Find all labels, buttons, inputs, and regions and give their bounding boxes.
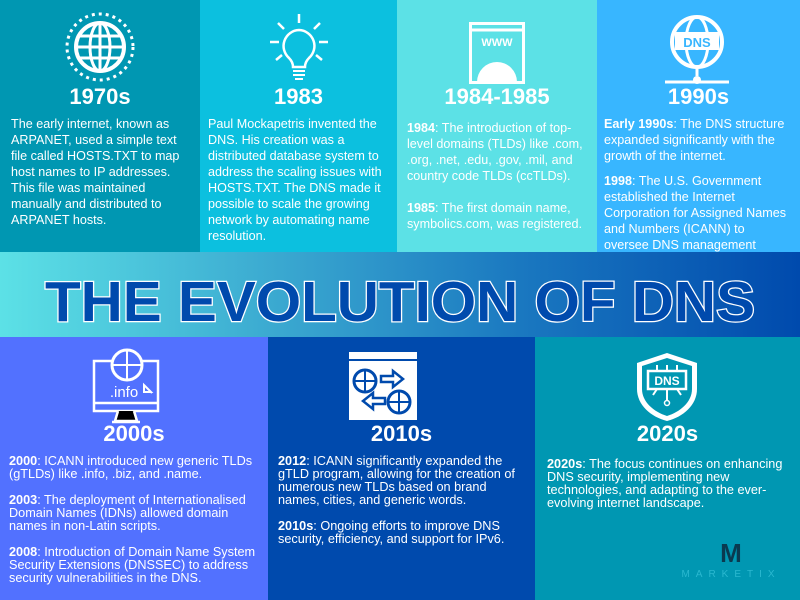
heading: 1970s (69, 84, 131, 109)
icon: DNS shield: DNS (654, 374, 680, 388)
heading: 2010s (371, 421, 432, 446)
icon: DNS globe (665, 15, 729, 84)
text: 1984: The introduction of top-level domains (TLDs) like .com, .org, .net, .edu, .gov, .mil, and country code TLDs (ccTLDs). (407, 121, 583, 183)
logo: Marketix: M (720, 538, 742, 568)
logo: Marketix (681, 538, 781, 580)
heading: 1990s (668, 84, 729, 109)
panel: 2000s (0, 337, 268, 600)
panel: 1983 (200, 0, 397, 252)
icon: DNS globe: DNS (683, 35, 711, 50)
panel: 1984-1985 (397, 0, 597, 252)
text: 2020s: The focus continues on enhancing DNS security, implementing new technologies, and adapting to the ever-evolving internet landscape. (547, 457, 782, 510)
icon: light bulb (270, 14, 328, 80)
icon: DNS shield (637, 353, 697, 421)
heading: 1984-1985 (444, 84, 550, 109)
heading: 2000s (103, 421, 165, 446)
text: 2012: ICANN significantly expanded the gTLD program, allowing for the creation of numerous new TLDs based on brand names, cities, and generic words. 2010s: Ongoing efforts to improve DNS security, efficiency, and support for IPv6. (278, 454, 515, 546)
icon: www browser: WWW (481, 37, 513, 49)
icon: globe exchange (349, 352, 417, 420)
heading: 2020s (637, 421, 698, 446)
text: 2000: ICANN introduced new generic TLDs (gTLDs) like .info, .biz, and .name. 2003: The deployment of Internationalised Domain Names (IDNs) allowed domain names in non-Latin scripts. 2008: Introduction of Domain Name System Security Extensions (DNSSEC) to address security vulnerabilities in the DNS. (9, 454, 255, 585)
icon: monitor .info: .info (110, 384, 138, 401)
icon: globe (66, 12, 134, 82)
text: 1985: The first domain name, symbolics.com, was registered. (407, 201, 582, 231)
heading: 1983 (274, 84, 323, 109)
panel: 2020s (535, 337, 800, 600)
text: Early 1990s: The DNS structure expanded significantly with the growth of the internet. 1998: The U.S. Government established the Internet Corporation for Assigned Names and Numbers (ICANN) to oversee DNS management (604, 117, 786, 252)
icon: monitor .info (92, 348, 160, 424)
text: Paul Mockapetris invented the DNS. His creation was a distributed database system to address the scaling issues with HOSTS.TXT. The DNS made it possible to scale the growing network by automating name resolution. (208, 117, 382, 243)
title band (0, 252, 800, 337)
text (407, 121, 583, 231)
icon: www browser (469, 22, 525, 84)
logo: Marketix: MARKETIX (681, 569, 781, 580)
panel: 2010s (268, 337, 535, 600)
panel: 1990s (597, 0, 800, 252)
text: The early internet, known as ARPANET, used a simple text file called HOSTS.TXT to map host names to IP addresses. This file was maintained manually and distributed to ARPANET hosts. (11, 117, 179, 227)
title: THE EVOLUTION OF DNS (45, 270, 755, 334)
panel: 1970s (0, 0, 200, 252)
